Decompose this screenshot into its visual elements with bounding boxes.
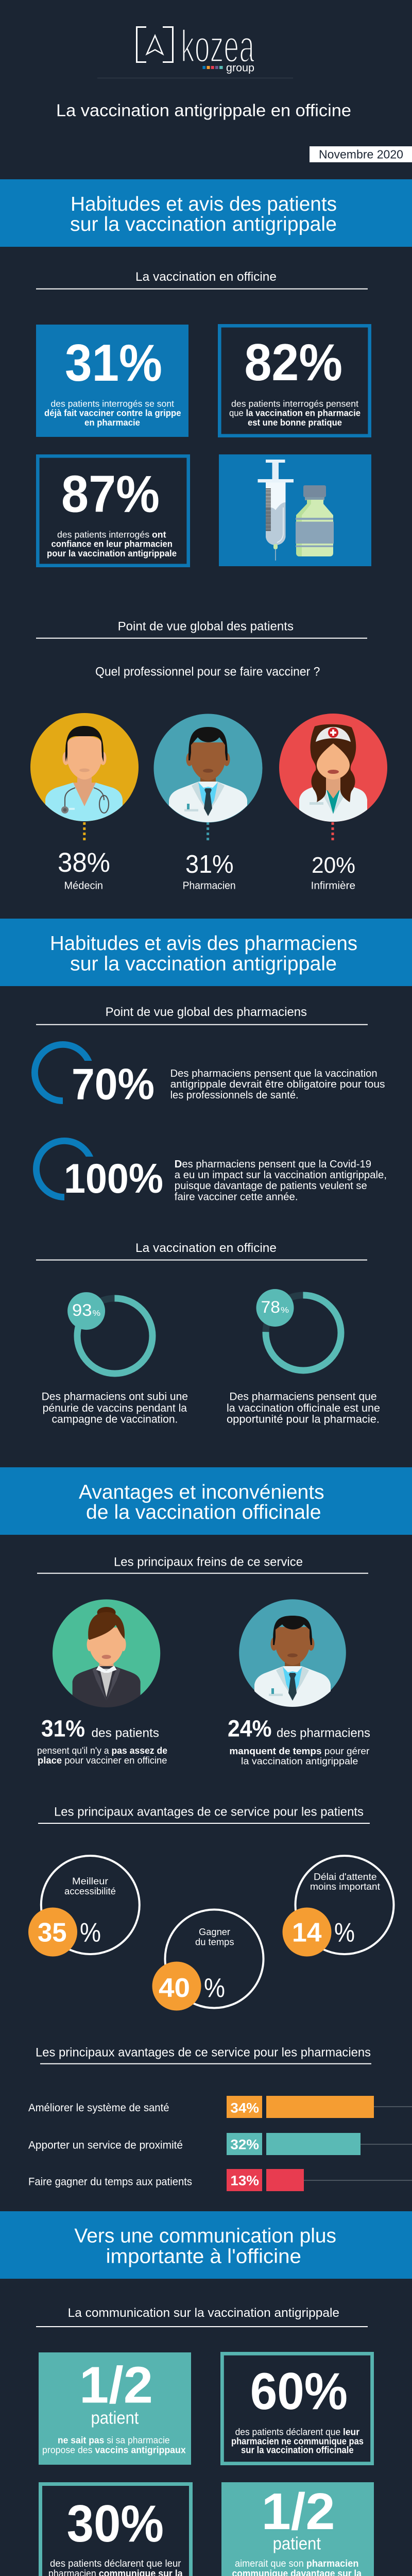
stat: 31% des patients: des patients — [92, 1726, 159, 1740]
text: 70% description — [170, 1068, 385, 1101]
stat: 24% des pharmaciens: 24% — [228, 1716, 272, 1741]
bubble: 14% délai d'attente — [282, 1856, 393, 1957]
card: 1/2 patient aimerait: patient — [273, 2534, 321, 2554]
bar row: apporter un service de proximité 32%: Apporter un service de proximité — [28, 2140, 183, 2151]
avatar: médecin — [30, 713, 139, 824]
bar row: apporter un service de proximité 32% — [28, 2133, 412, 2155]
card: 1/2 patient ne sait pas: 1/2 — [79, 2357, 153, 2414]
bubble: 40% gagner du temps: % — [204, 1973, 225, 2003]
stat: 70% arc gauge — [35, 1044, 154, 1109]
bar row: faire gagner du temps aux patients 13% — [28, 2169, 412, 2191]
avatar: pharmacien — [153, 714, 263, 825]
heading: la vaccination en officine: La vaccination en officine — [135, 270, 277, 284]
stat: 38% médecin — [58, 848, 110, 891]
section banner: communication: importante à l'officine — [106, 2246, 301, 2268]
text: 78% description: la vaccination officinale est une — [227, 1402, 380, 1414]
stat: 100% arc gauge — [36, 1141, 163, 1204]
date tag: Novembre 2020 — [319, 147, 403, 161]
bubble: 40% gagner du temps: 40 — [159, 1973, 190, 2003]
card: 82%: des patients interrogés pensent — [231, 399, 358, 409]
bubble: 40% gagner du temps: du temps — [195, 1937, 234, 1947]
stat: 31% des patients: pensent qu'il n'y a pas assez de — [37, 1745, 167, 1756]
text: 100% description — [175, 1159, 387, 1202]
card: 1/2 patient aimerait: 1/2 — [262, 2483, 335, 2540]
text: 70% description: Des pharmaciens pensent que la vaccination — [170, 1068, 377, 1079]
question: Quel professionnel pour se faire vacciner ? — [95, 665, 320, 679]
bubble: 35% meilleure accessibilité: Meilleur — [72, 1876, 108, 1887]
section banner: communication — [0, 2211, 412, 2279]
card: 60%: sur la vaccination officinale — [241, 2445, 354, 2455]
card: 87%: 87% — [61, 466, 160, 523]
bubble: 35% meilleure accessibilité: accessibilité — [64, 1886, 116, 1896]
stat: 24% des pharmaciens — [228, 1716, 370, 1766]
heading: avantages pour les pharmaciens: Les principaux avantages de ce service pour les pharmaciens — [36, 2046, 371, 2060]
card: 82%: 82% — [244, 334, 342, 392]
stat: 31% des patients: place pour vacciner en officine — [38, 1755, 167, 1766]
stat: 38% médecin: 38% — [58, 848, 110, 878]
bubble: 35% meilleure accessibilité — [28, 1856, 140, 1957]
heading: la vaccination en officine (pharmaciens): La vaccination en officine — [135, 1241, 277, 1255]
bar row: faire gagner du temps aux patients 13%: Faire gagner du temps aux patients — [28, 2176, 192, 2188]
card: syringe and vial illustration — [219, 454, 371, 566]
card: 31%: en pharmacie — [84, 417, 140, 428]
text: 100% description: faire vacciner cette année. — [175, 1191, 298, 1202]
title: La vaccination antigrippale en officine — [56, 101, 351, 120]
section banner: pharmaciens: Habitudes et avis des pharmaciens — [50, 933, 357, 955]
avatar: pharmacien (freins) — [239, 1599, 346, 1709]
card: 31%: des patients interrogés se sont — [50, 399, 174, 409]
dotted connector: infirmière — [332, 822, 334, 841]
card: 60%: 60% — [250, 2363, 348, 2420]
icon: syringe — [258, 460, 294, 561]
section banner: communication: Vers une communication plus — [74, 2225, 336, 2247]
card: 87%: des patients interrogés ont — [57, 530, 166, 540]
logo: Kozea group — [137, 21, 254, 74]
section banner: pharmaciens — [0, 919, 412, 986]
card: 31% — [36, 325, 188, 437]
card: 30% — [40, 2484, 191, 2576]
stat: 70% arc gauge: 70% — [72, 1060, 154, 1109]
card: 30%: des patients déclarent que leur — [50, 2558, 181, 2569]
text: 78% description — [227, 1391, 380, 1426]
text: 93% description: pénurie de vaccins pendant la — [43, 1402, 187, 1414]
card: 1/2 patient ne sait pas — [39, 2352, 191, 2465]
section banner: pharmaciens: sur la vaccination antigrippale — [70, 953, 337, 975]
date tag — [310, 146, 412, 162]
dotted connector: pharmacien — [207, 822, 209, 841]
card: 60%: pharmacien ne communique pas — [231, 2436, 364, 2446]
bubble: 35% meilleure accessibilité: % — [80, 1918, 101, 1947]
heading: avantages pour les patients: Les principaux avantages de ce service pour les patients — [54, 1805, 364, 1819]
card: 1/2 patient ne sait pas: ne sait pas si sa pharmacie — [58, 2435, 170, 2445]
donut: 93%: 93 — [72, 1301, 92, 1319]
stat: 24% des pharmaciens: manquent de temps pour gérer — [229, 1746, 369, 1756]
text: 93% description: Des pharmaciens ont subi une — [42, 1391, 188, 1403]
stat: 24% des pharmaciens: la vaccination antigrippale — [241, 1756, 358, 1766]
text: 100% description: puisque davantage de patients veulent se — [175, 1180, 367, 1192]
bar row: améliorer le système de santé 34%: 34% — [230, 2100, 259, 2116]
card: 1/2 patient aimerait — [221, 2482, 374, 2576]
card: 82%: que la vaccination en pharmacie — [229, 408, 360, 418]
heading: point de vue global des patients: Point de vue global des patients — [118, 619, 294, 633]
heading: la communication: La communication sur la vaccination antigrippale — [68, 2306, 339, 2320]
section banner: patients: Habitudes et avis des patients — [71, 193, 337, 215]
section banner: patients: sur la vaccination antigrippale — [70, 213, 337, 235]
bar row: améliorer le système de santé 34%: Améliorer le système de santé — [28, 2102, 169, 2114]
bubble: 14% délai d'attente: moins important — [310, 1882, 380, 1892]
stat: 31% des patients — [37, 1716, 167, 1766]
card: 82%: est une bonne pratique — [248, 417, 342, 428]
card: 31%: déjà fait vacciner contre la grippe — [44, 408, 181, 418]
card: 87%: pour la vaccination antigrippale — [47, 548, 177, 558]
text: 100% description: Des pharmaciens pensent que la Covid-19 — [175, 1159, 371, 1170]
heading: point de vue global des pharmaciens: Point de vue global des pharmaciens — [106, 1005, 307, 1019]
bubble: 14% délai d'attente: % — [334, 1918, 355, 1947]
donut: 93%: % — [93, 1309, 100, 1318]
stat: 20% infirmière: 20% — [312, 853, 355, 878]
text: 93% description: campagne de vaccination. — [52, 1414, 178, 1426]
card: 60%: des patients déclarent que leur — [235, 2427, 359, 2437]
stat: 100% arc gauge: 100% — [64, 1156, 163, 1202]
bar chart: avantages pharmaciens — [28, 2096, 412, 2191]
logo: Kozea group: group — [226, 62, 254, 74]
stat: 24% des pharmaciens: des pharmaciens — [277, 1726, 370, 1740]
card: 30%: 30% — [67, 2495, 164, 2553]
bubble: 40% gagner du temps — [152, 1909, 264, 2010]
avatar: patiente — [53, 1599, 160, 1710]
donut: 78% — [256, 1289, 341, 1370]
bubble: 35% meilleure accessibilité: 35 — [38, 1918, 67, 1947]
card: 82% — [219, 326, 370, 436]
heading: les principaux freins: Les principaux freins de ce service — [114, 1555, 303, 1569]
card: 87% — [38, 456, 188, 566]
stat: 31% des patients: 31% — [41, 1716, 85, 1741]
bubble: 14% délai d'attente: Délai d'attente — [314, 1872, 377, 1882]
donut: 78%: 78 — [261, 1298, 280, 1316]
stat: 31% pharmacien: Pharmacien — [183, 880, 236, 891]
icon: vial — [296, 485, 334, 556]
card: 60% — [222, 2353, 372, 2464]
avatar: infirmière — [279, 714, 387, 824]
bar row: apporter un service de proximité 32%: 32% — [230, 2137, 259, 2152]
card: 31%: 31% — [65, 334, 162, 392]
stat: 38% médecin: Médecin — [64, 880, 103, 891]
stat: 20% infirmière — [311, 853, 355, 891]
bubble: 40% gagner du temps: Gagner — [199, 1927, 230, 1937]
section banner: patients — [0, 179, 412, 247]
text: 100% description: a eu un impact sur la vaccination antigrippale, — [175, 1170, 387, 1181]
text: 78% description: Des pharmaciens pensent que — [229, 1391, 377, 1403]
text: 78% description: opportunité pour la pharmacie. — [227, 1414, 380, 1426]
card: 1/2 patient ne sait pas: propose des vaccins antigrippaux — [42, 2445, 186, 2455]
bubble: 14% délai d'attente: 14 — [292, 1918, 322, 1947]
text: 93% description — [42, 1391, 188, 1426]
dotted connector: médecin — [83, 822, 85, 841]
text: 70% description: antigrippale devrait être obligatoire pour tous — [170, 1079, 385, 1090]
stat: 31% pharmacien — [183, 851, 236, 891]
card: 1/2 patient ne sait pas: patient — [91, 2408, 139, 2428]
bar row: améliorer le système de santé 34% — [28, 2096, 412, 2118]
bar row: faire gagner du temps aux patients 13%: 13% — [230, 2173, 259, 2188]
section banner: avantages et inconvénients — [0, 1467, 412, 1535]
stat: 31% pharmacien: 31% — [185, 851, 234, 878]
donut: 78%: % — [281, 1306, 289, 1315]
card: 1/2 patient aimerait: aimerait que son pharmacien — [235, 2558, 358, 2569]
donut: 93% — [67, 1292, 152, 1374]
section banner: avantages et inconvénients: Avantages et inconvénients — [79, 1481, 324, 1503]
stat: 20% infirmière: Infirmière — [311, 880, 355, 891]
text: 70% description: les professionnels de santé. — [170, 1090, 299, 1101]
section banner: avantages et inconvénients: de la vaccination officinale — [86, 1501, 321, 1523]
card: 87%: confiance en leur pharmacien — [52, 539, 173, 549]
logo: Kozea group: kozea — [181, 21, 254, 72]
